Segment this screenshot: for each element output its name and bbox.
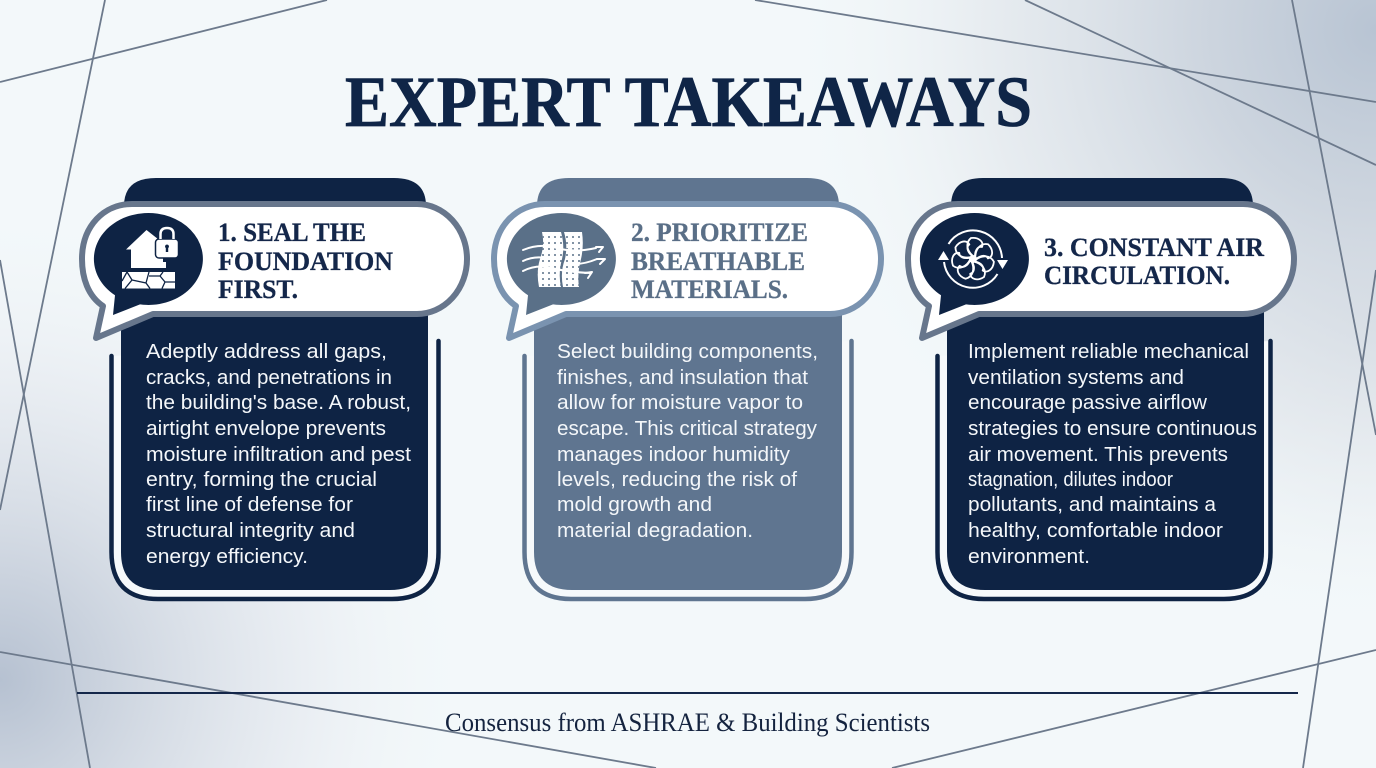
body text: Implement reliable mechanical — [968, 341, 1249, 363]
body text: moisture infiltration and pest — [146, 444, 411, 466]
body text: stagnation, dilutes indoor — [968, 469, 1173, 491]
panel: seal the foundation — [82, 178, 467, 599]
body text: ventilation systems and — [968, 367, 1184, 389]
heading — [1044, 233, 1264, 290]
body text: airtight envelope prevents — [146, 418, 386, 440]
body text — [968, 341, 1257, 568]
heading: BREATHABLE — [631, 247, 805, 276]
card outer frame — [524, 341, 852, 599]
body text: entry, forming the crucial — [146, 469, 377, 491]
body text: air movement. This prevents — [968, 444, 1228, 466]
card top tab — [537, 178, 839, 215]
title: EXPERT TAKEAWAYS — [345, 62, 1032, 142]
icon: fan with circulating arrows — [920, 213, 1029, 315]
body text — [146, 341, 411, 568]
speech bubble — [82, 204, 467, 338]
body text: escape. This critical strategy — [557, 418, 817, 440]
body text: manages indoor humidity — [557, 444, 790, 466]
body text: cracks, and penetrations in — [146, 367, 392, 389]
body text: structural integrity and — [146, 520, 355, 542]
heading: CIRCULATION. — [1044, 261, 1230, 290]
body text: energy efficiency. — [146, 546, 308, 568]
body text: finishes, and insulation that — [557, 367, 808, 389]
card top tab — [951, 178, 1253, 215]
icon: house with lock on foundation — [94, 213, 203, 315]
heading: FOUNDATION — [218, 247, 393, 276]
body text — [557, 341, 818, 542]
body text: material degradation. — [557, 520, 753, 542]
body text: encourage passive airflow — [968, 392, 1208, 414]
body text: the building's base. A robust, — [146, 392, 411, 414]
card outer frame — [112, 341, 438, 599]
body text: environment. — [968, 546, 1090, 568]
heading — [218, 218, 393, 304]
card top tab — [124, 178, 426, 215]
footer source text: Consensus from ASHRAE & Building Scientists — [445, 708, 930, 737]
card body — [534, 300, 842, 590]
body text: mold growth and — [557, 494, 712, 516]
speech bubble — [494, 204, 881, 338]
body text: allow for moisture vapor to — [557, 392, 803, 414]
heading: 3. CONSTANT AIR — [1044, 233, 1264, 262]
heading: MATERIALS. — [631, 275, 788, 304]
heading: FIRST. — [218, 275, 298, 304]
footer divider — [77, 692, 1298, 694]
card outer frame — [938, 341, 1270, 599]
body text: pollutants, and maintains a — [968, 494, 1217, 516]
body text: Adeptly address all gaps, — [146, 341, 387, 363]
body text: first line of defense for — [146, 494, 353, 516]
heading: 2. PRIORITIZE — [631, 218, 808, 247]
heading — [631, 218, 808, 304]
body text: levels, reducing the risk of — [557, 469, 797, 491]
speech bubble — [908, 204, 1294, 338]
panel: constant air circulation — [908, 178, 1294, 599]
body text: Select building components, — [557, 341, 818, 363]
heading: 1. SEAL THE — [218, 218, 366, 247]
panel: prioritize breathable materials — [494, 178, 881, 599]
body text: healthy, comfortable indoor — [968, 520, 1223, 542]
body text: strategies to ensure continuous — [968, 418, 1257, 440]
icon: breathable material with airflow — [507, 213, 616, 315]
card body — [947, 300, 1264, 590]
card body — [121, 300, 428, 590]
